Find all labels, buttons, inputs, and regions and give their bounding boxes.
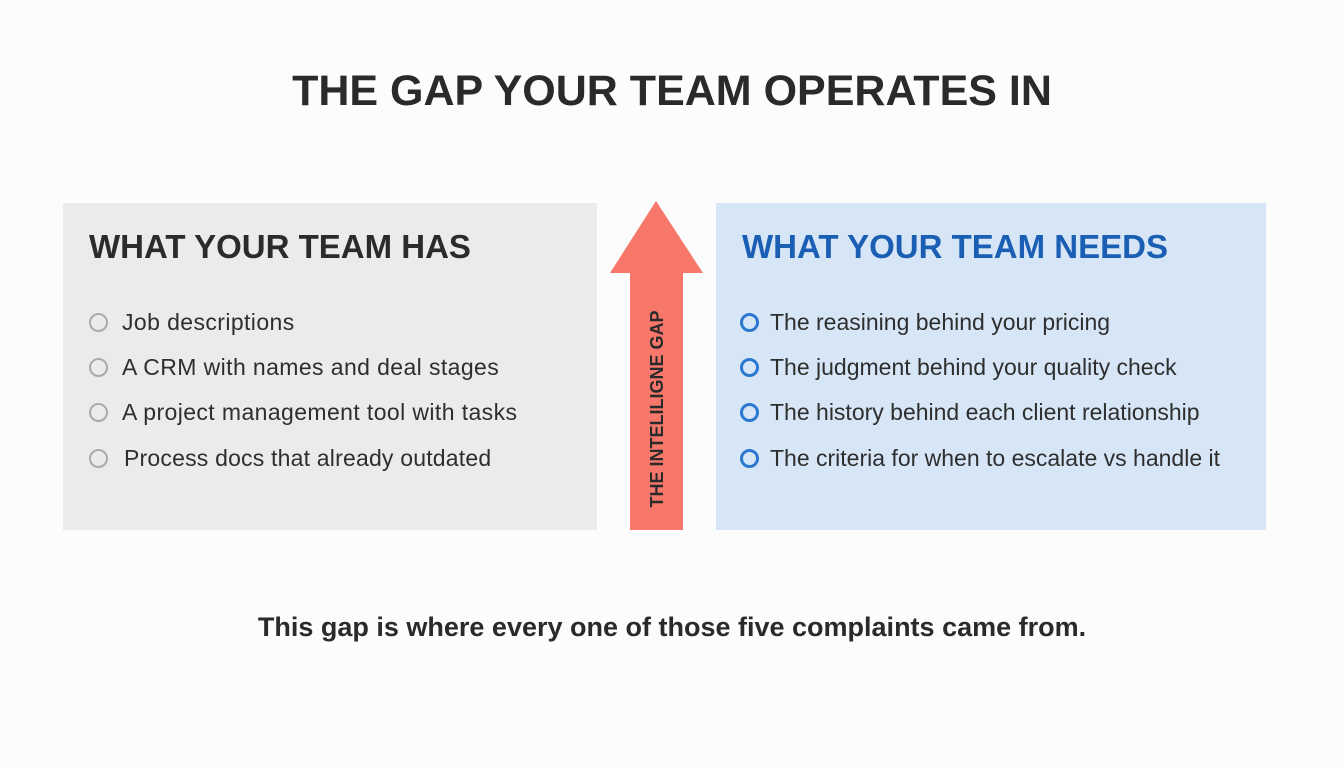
item 3: A project management tool with tasks	[122, 399, 517, 425]
panel: what your team needs	[716, 203, 1266, 530]
item 3: The history behind each client relationship	[770, 399, 1200, 425]
arrow: the intelligence gap: THE INTELILIGNE GAP	[647, 310, 667, 508]
arrow: the intelligence gap	[610, 201, 703, 530]
item 2: The judgment behind your quality check	[770, 354, 1177, 380]
item 2: A CRM with names and deal stages	[122, 354, 499, 380]
panel: what your team has	[63, 203, 597, 530]
item 1: Job descriptions	[122, 309, 295, 335]
footer text: This gap is where every one of those five complaints came from.	[258, 612, 1086, 642]
heading: needs: WHAT YOUR TEAM NEEDS	[742, 228, 1168, 265]
item 4: Process docs that already outdated	[124, 445, 491, 471]
item 1: The reasining behind your pricing	[770, 309, 1110, 335]
item 4: The criteria for when to escalate vs handle it	[770, 445, 1220, 471]
title: THE GAP YOUR TEAM OPERATES IN	[292, 67, 1052, 115]
heading: has: WHAT YOUR TEAM HAS	[89, 228, 471, 265]
